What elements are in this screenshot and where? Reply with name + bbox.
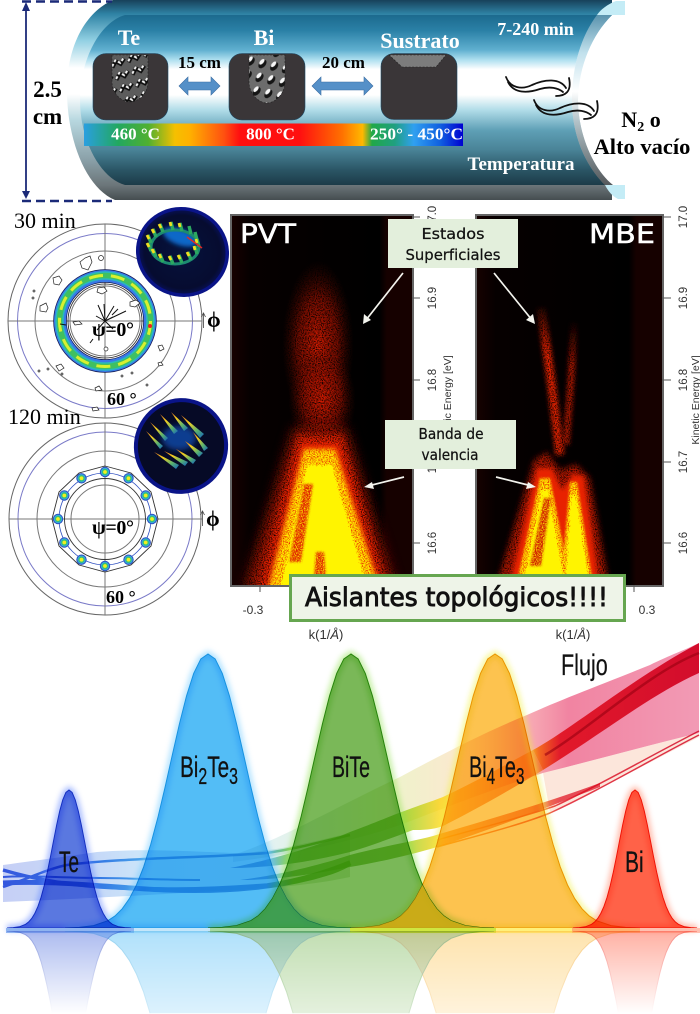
- label: Bi: Bi: [625, 847, 644, 879]
- distance label: 20 cm: 20 cm: [322, 53, 365, 72]
- noise contours: [32, 256, 164, 411]
- label: BiTe: BiTe: [332, 751, 370, 784]
- ribbon: material flux: [3, 643, 699, 902]
- label: Bi4Te3: Te: [495, 751, 516, 784]
- diffraction spots: [53, 467, 157, 571]
- time label: 7-240 min: [497, 19, 574, 39]
- label: Bi2Te3: 2: [198, 764, 207, 790]
- panel: phase flux diagram: [3, 643, 700, 1013]
- overlap: Bi2Te3 and BiTe: [210, 885, 350, 928]
- PVT intensity map: [232, 216, 412, 590]
- chart: PVT photoemission map: [231, 215, 413, 590]
- arrow: 20 cm distance: [312, 77, 373, 95]
- icon: 3D intensity inset 30 min: [126, 196, 239, 308]
- peak: Te: [7, 790, 131, 928]
- polar rings: [8, 224, 202, 418]
- crucible: Sustrato: [381, 54, 457, 120]
- heading: Sustrato: Sustrato: [380, 28, 460, 53]
- label: Bi2Te3: 3: [229, 764, 238, 790]
- label: phi axis: ϕ: [206, 506, 220, 531]
- icon: gas flow: [506, 77, 598, 119]
- label: Bi2Te3: Bi: [180, 751, 198, 784]
- crucible: Te: [93, 54, 168, 120]
- callout: Banda de valencia: [385, 420, 516, 469]
- axis: MBE energy axis: [662, 206, 700, 554]
- polar rings: [9, 423, 202, 615]
- label: 120 min: 120 min: [8, 404, 81, 429]
- green-orange lower band: [240, 783, 600, 880]
- axis: PVT energy axis: [412, 206, 454, 554]
- callout: Banda de valencia: valencia: [422, 446, 478, 464]
- axis: MBE energy axis: 16.7: [678, 451, 690, 473]
- peak: Bi: [573, 790, 697, 928]
- label: psi 0: ψ=0°: [92, 517, 134, 539]
- axis: MBE energy axis: 16.8: [678, 369, 690, 391]
- peak: BiTe: [208, 654, 494, 928]
- label: PVT: PVT: [240, 219, 297, 250]
- axis: PVT energy axis: Kinetic Energy [eV]: [442, 355, 454, 445]
- label: N2 o: 2: [637, 120, 644, 135]
- label: Bi4Te3: 4: [487, 764, 495, 790]
- icon: 3D intensity inset 120 min: [123, 387, 239, 505]
- peak: Bi2Te3: [65, 654, 351, 928]
- crucible: Bi: [229, 54, 305, 120]
- label: MBE: MBE: [589, 219, 655, 250]
- label: Bi4Te3: Bi: [469, 751, 487, 784]
- label: 60 degrees: 60 °: [107, 389, 137, 409]
- label: Bi2Te3: Te: [207, 751, 229, 784]
- axis: MBE energy axis: 17.0: [678, 206, 690, 228]
- dimension arrow: 2.5 cm: [22, 2, 112, 201]
- axis: PVT energy axis: 16.9: [427, 287, 439, 309]
- center streaks: [60, 304, 126, 343]
- axis: PVT energy axis: 17.0: [427, 206, 439, 228]
- label: psi 0: ψ=0°: [92, 319, 134, 341]
- red core of ribbon: [533, 643, 699, 770]
- callout: Aislantes topológicos: Aislantes topológicos!!!!: [305, 583, 608, 613]
- MBE intensity map: [477, 216, 662, 590]
- label: 2.5 cm: cm: [33, 104, 62, 129]
- panel: furnace tube diagram: [22, 0, 690, 201]
- label: Bi4Te3: 3: [516, 764, 524, 790]
- label: 60 degrees: 60 °: [106, 587, 136, 607]
- temperature caption: Temperatura: [468, 154, 575, 175]
- label: N2 o: o: [644, 107, 661, 132]
- axis: PVT energy axis: 16.6: [427, 532, 439, 554]
- base line band: [6, 928, 700, 933]
- axis: momentum labels: k(1/Å): [556, 627, 590, 642]
- chart: polar figure 30 min: [8, 208, 221, 418]
- label: N2 o: N: [621, 107, 637, 132]
- label: phi axis: ϕ: [207, 307, 221, 332]
- axis: momentum labels: 0.3: [639, 603, 656, 617]
- axis: momentum labels: -0.3: [243, 603, 264, 617]
- callout: Estados Superficiales: Estados: [422, 225, 485, 243]
- callout: Estados Superficiales: Superficiales: [406, 246, 501, 264]
- label: Alto vacío: Alto vacío: [594, 134, 690, 159]
- temperature: 250°-450°C: 250° - 450°C: [370, 124, 463, 144]
- reflection of side peaks: [7, 931, 697, 1012]
- peak: Bi4Te3: [350, 654, 640, 928]
- axis: MBE energy axis: 16.9: [678, 287, 690, 309]
- reflection of central peaks: [65, 931, 640, 1013]
- heading: Bi: Bi: [254, 25, 274, 50]
- intensity ring: [60, 276, 152, 366]
- chart: MBE photoemission map: [476, 215, 663, 590]
- callout: Estados Superficiales: [388, 219, 518, 268]
- distance label: 15 cm: 15 cm: [178, 53, 221, 72]
- green-orange upper band: [230, 750, 543, 868]
- tube body: [67, 0, 625, 200]
- arrows: callout pointers: [363, 273, 536, 489]
- axis: MBE energy axis: 16.6: [678, 532, 690, 554]
- label: Te: Te: [59, 846, 79, 879]
- label: Flujo: Flujo: [561, 647, 608, 682]
- axis: PVT energy axis: 16.7: [427, 451, 439, 473]
- label: 2.5 cm: 2.5: [33, 77, 62, 102]
- callout: Aislantes topológicos: [290, 576, 624, 620]
- bell glows: [7, 654, 697, 928]
- temperature gradient bar: [84, 124, 463, 146]
- axis: PVT energy axis: 16.8: [427, 369, 439, 391]
- overlap: BiTe and Bi4Te3: [350, 885, 494, 928]
- heading: Te: Te: [118, 25, 140, 50]
- arrow: 15 cm distance: [179, 77, 220, 95]
- chart: polar figure 120 min: [8, 404, 220, 615]
- axis: momentum labels: k(1/Å): [309, 627, 343, 642]
- temperature: 800 °C: 800 °C: [246, 124, 295, 144]
- callout: Banda de valencia: Banda de: [418, 425, 484, 443]
- temperature: 460 °C: 460 °C: [111, 124, 160, 144]
- axis: momentum labels: [243, 585, 656, 642]
- label: 30 min: 30 min: [14, 208, 76, 233]
